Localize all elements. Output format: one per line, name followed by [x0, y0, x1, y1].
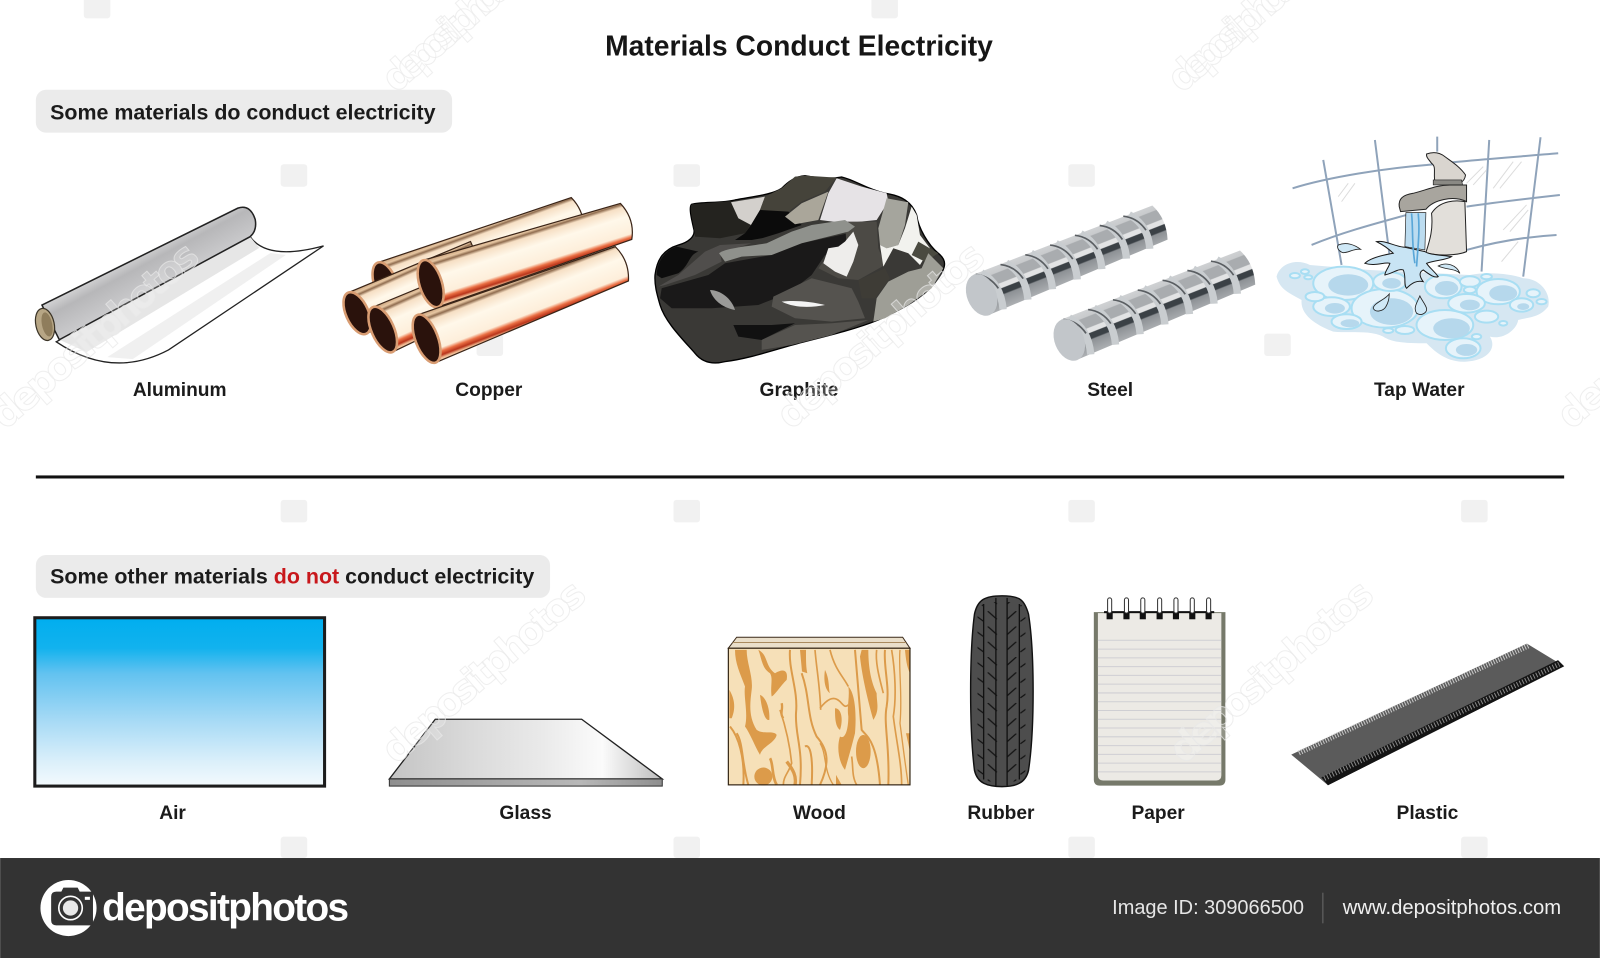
icon: plastic ruler: [1291, 644, 1564, 785]
label: Aluminum: Aluminum: [133, 380, 227, 401]
icon: camera logo: [40, 880, 97, 936]
label: Glass: Glass: [499, 803, 552, 824]
label: Rubber: Rubber: [967, 803, 1035, 824]
label: Plastic: Plastic: [1397, 803, 1459, 824]
logo wordmark: depositphotos: [102, 886, 349, 929]
icon: paper notepad: [1094, 598, 1225, 786]
heading: materials that do not conduct: [36, 555, 550, 598]
watermark text: depositphotos: [1161, 571, 1383, 773]
divider: [36, 475, 1564, 478]
icon: aluminum foil roll: [33, 207, 324, 363]
label: Tap Water: Tap Water: [1374, 380, 1465, 401]
icon: glass sheet: [389, 719, 662, 786]
watermark text: depositphotos: [768, 233, 994, 438]
label: Steel: Steel: [1087, 380, 1133, 401]
label: Paper: Paper: [1131, 803, 1185, 824]
icon: tap water faucet and puddle: [1277, 137, 1560, 362]
title: Materials Conduct Electricity: [605, 30, 993, 62]
background watermark camera marks: [84, 0, 1488, 858]
label: Graphite: Graphite: [760, 380, 838, 401]
watermark text: depositphotos: [373, 571, 595, 773]
icon: air panel: [35, 618, 325, 786]
heading: materials that do not conduct: Some other materials do not conduct electricity: [50, 565, 534, 589]
label: Copper: Copper: [455, 380, 523, 401]
icon: copper tubes: [338, 191, 638, 367]
heading: materials that conduct: [36, 90, 452, 133]
heading: materials that conduct: Some materials do conduct electricity: [50, 100, 436, 124]
icon: wood plank: [728, 637, 910, 786]
footer bar: [0, 858, 1600, 958]
website: www.depositphotos.com: [1342, 897, 1561, 919]
icon: graphite rock: [655, 176, 945, 363]
image id: Image ID: 309066500: [1112, 897, 1304, 919]
icon: rubber tire: [971, 596, 1033, 787]
label: Air: Air: [159, 803, 186, 824]
icon: steel rebars: [960, 203, 1260, 365]
label: Wood: Wood: [793, 803, 846, 824]
